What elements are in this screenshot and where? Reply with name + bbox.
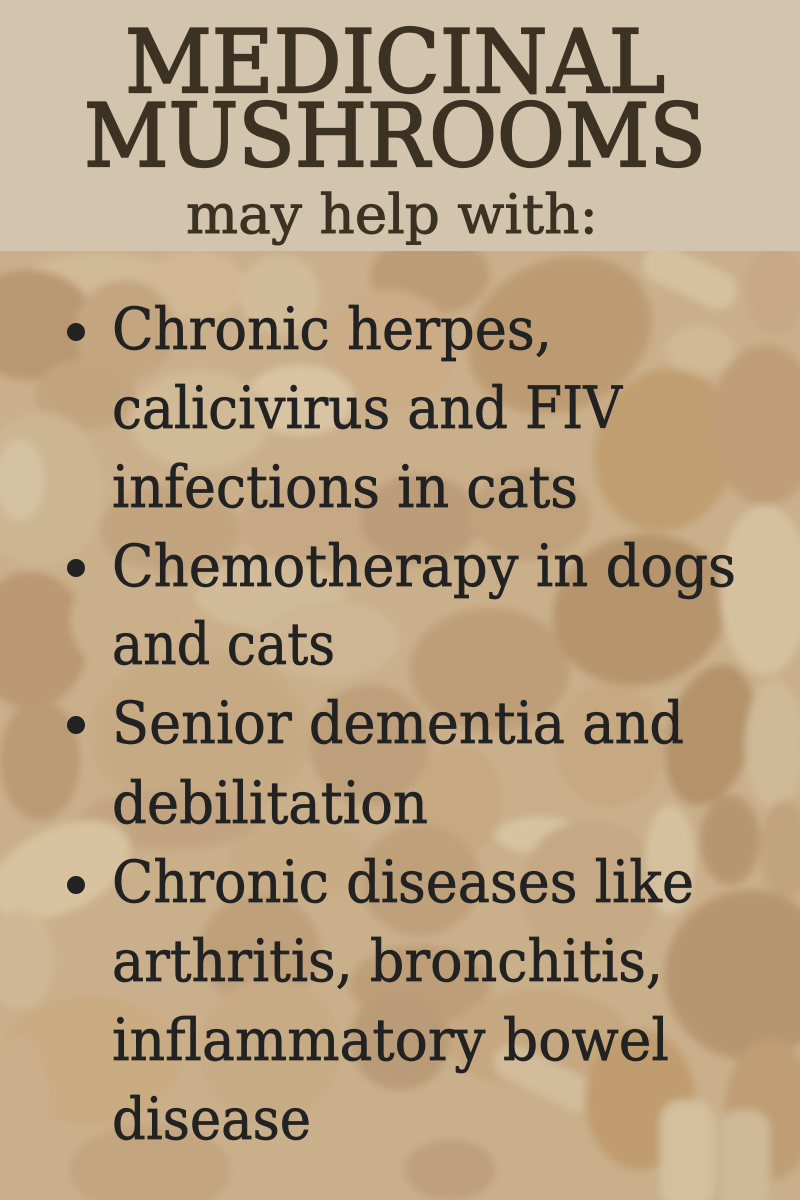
list item: chronic diseases: arthritis, bronchitis, [112,927,663,995]
list item: senior dementia: debilitation [112,769,428,837]
list item: senior dementia [67,689,684,837]
list item: chronic diseases [67,848,694,1153]
list item: senior dementia: Senior dementia and [112,689,684,757]
list item: cats infections: infections in cats [112,453,578,521]
list item: chronic diseases: inflammatory bowel [112,1006,669,1074]
title: medicinal: MEDICINAL [125,11,665,113]
list item: cats infections [67,295,623,521]
list item: chemotherapy: Chemotherapy in dogs [112,532,736,600]
subtitle: may help with: [186,183,598,246]
list item: cats infections: calicivirus and FIV [112,374,623,442]
title: mushrooms: MUSHROOMS [84,85,706,187]
panel: title header band [0,0,800,251]
list item: chemotherapy [67,532,736,678]
list item: cats infections: Chronic herpes, [112,295,552,363]
list item: chronic diseases: disease [112,1085,311,1153]
list item: chemotherapy: and cats [112,610,335,678]
list item: chronic diseases: Chronic diseases like [112,848,694,916]
